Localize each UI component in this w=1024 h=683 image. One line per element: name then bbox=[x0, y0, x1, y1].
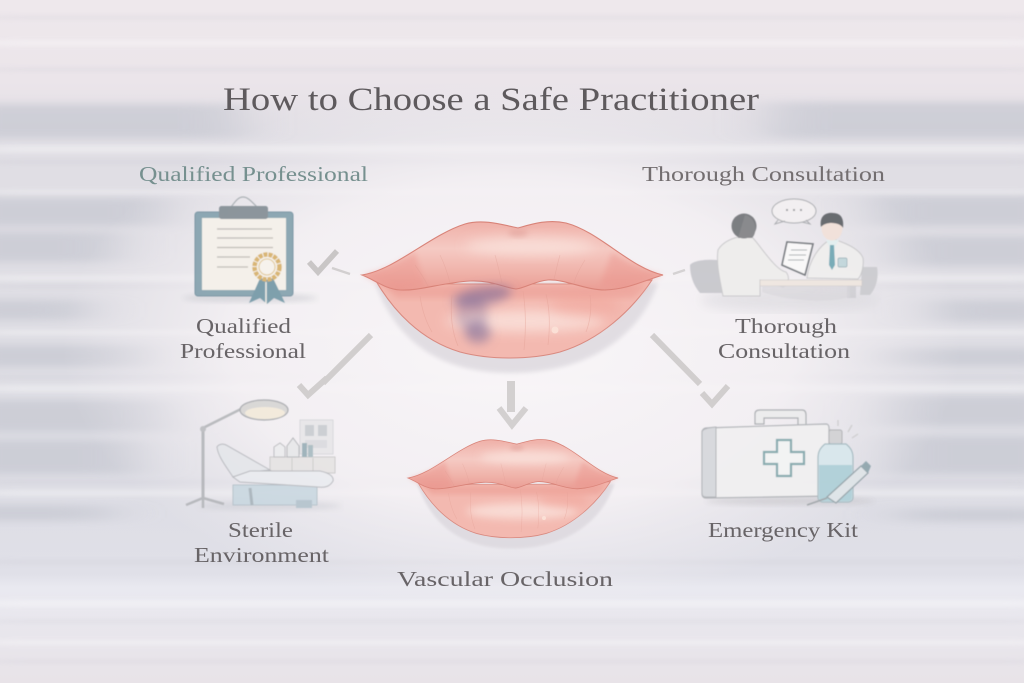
label: thorough consultation bbox=[718, 314, 851, 363]
label: sterile environment: Environment bbox=[194, 543, 329, 567]
heading: qualified professional: Qualified Professional bbox=[139, 162, 368, 186]
arrow: down-left with check bbox=[299, 335, 371, 395]
label: qualified professional: Professional bbox=[180, 339, 306, 363]
dash: top right connector bbox=[673, 270, 685, 274]
label: sterile environment: Sterile bbox=[228, 518, 293, 542]
title: How to Choose a Safe Practitioner bbox=[223, 82, 759, 118]
main lips with bruise bbox=[362, 222, 663, 373]
label: thorough consultation: Thorough bbox=[735, 314, 838, 338]
label: qualified professional bbox=[180, 314, 306, 363]
label: vascular occlusion: Vascular Occlusion bbox=[397, 567, 614, 591]
icon: doctor consultation bbox=[690, 199, 880, 312]
check: top left bbox=[309, 251, 350, 274]
arrow: down centre bbox=[499, 381, 526, 425]
icon: certificate on clipboard bbox=[182, 197, 318, 304]
label: emergency kit: Emergency Kit bbox=[708, 518, 858, 542]
heading: thorough consultation: Thorough Consultation bbox=[642, 162, 886, 186]
icon: sterile treatment room bbox=[186, 400, 342, 510]
label: thorough consultation: Consultation bbox=[718, 339, 851, 363]
secondary lips bbox=[408, 440, 618, 549]
icon: emergency kit bbox=[702, 410, 875, 505]
label: qualified professional: Qualified bbox=[196, 314, 292, 338]
label: sterile environment bbox=[194, 518, 329, 567]
arrow: down-right with check bbox=[652, 335, 728, 404]
